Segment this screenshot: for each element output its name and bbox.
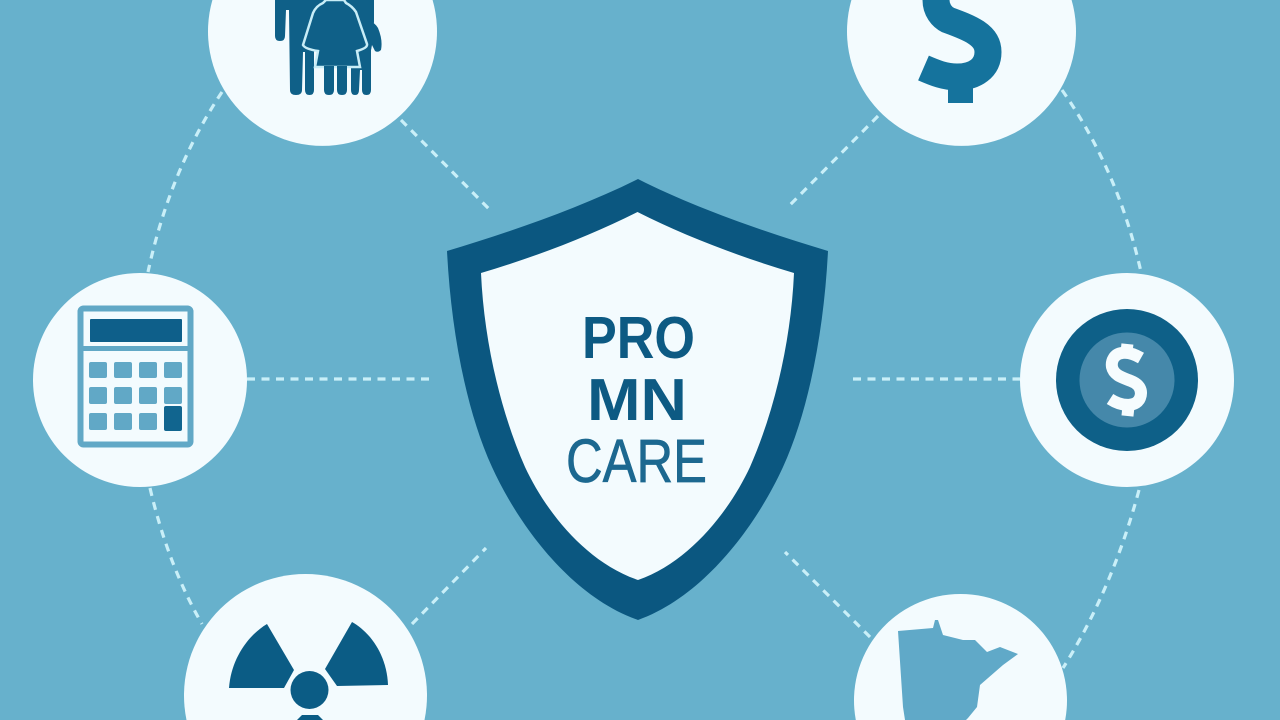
icon: family group xyxy=(275,0,382,95)
central shield xyxy=(447,179,828,620)
dashed connector network xyxy=(148,90,1141,668)
icon: dollar coin xyxy=(1056,309,1198,451)
shield inner panel xyxy=(481,212,794,580)
shield label: PRO xyxy=(582,305,695,371)
icon: radiation trefoil xyxy=(229,622,388,720)
shield label xyxy=(566,305,707,495)
icon circle: calculator xyxy=(33,273,247,487)
icon: Minnesota state map xyxy=(898,620,1018,720)
icon: calculator xyxy=(80,308,190,444)
shield label: CARE xyxy=(566,427,707,495)
icon circle: family xyxy=(208,0,437,146)
icon circle: radiation xyxy=(184,574,427,720)
shield label: MN xyxy=(587,367,687,433)
icon: dollar sign xyxy=(924,0,988,103)
icon circle: Minnesota xyxy=(854,594,1067,720)
icon circle: large dollar xyxy=(847,0,1076,146)
icon circle: coin xyxy=(1020,273,1234,487)
shield outer border xyxy=(447,179,828,620)
